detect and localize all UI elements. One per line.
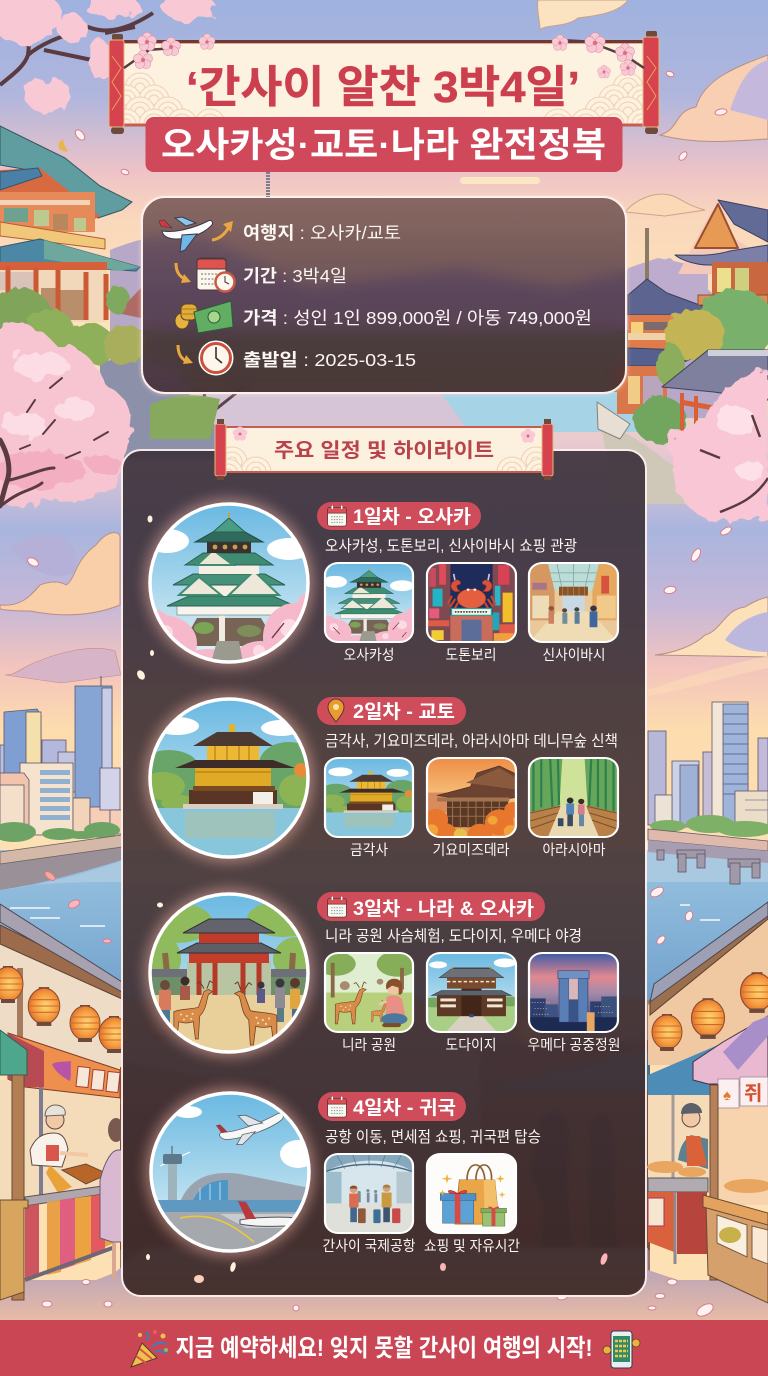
distant market street behind the panel xyxy=(120,992,650,1320)
right food stall: 쥐 xyxy=(744,1082,762,1105)
thumbnail: Kiyomizudera xyxy=(426,757,518,838)
thumbnail labels: 금각사 xyxy=(350,842,388,859)
right city skyline xyxy=(648,702,768,837)
river and bridges xyxy=(0,829,768,1020)
thumbnail: Arashiyama xyxy=(529,758,618,837)
thumbnail labels: 우메다 공중정원 xyxy=(528,1037,620,1054)
day 4 description: 공항 이동, 면세점 쇼핑, 귀국편 탑승 xyxy=(325,1128,541,1146)
thumbnail labels: 오사카성 xyxy=(344,647,394,664)
thumbnail labels xyxy=(342,1037,620,1054)
left temple xyxy=(0,126,147,367)
corner blossom sprays xyxy=(124,32,644,78)
icon: calendar with clock xyxy=(176,258,234,292)
footer text: 지금 예약하세요! 잊지 못할 간사이 여행의 시작! xyxy=(176,1335,592,1362)
left tree branches xyxy=(0,378,108,506)
thumbnail labels: 도톤보리 xyxy=(446,647,496,664)
icon: airplane and arrow xyxy=(159,217,233,252)
icon: smartphone xyxy=(603,1331,640,1368)
subtitle ribbon xyxy=(146,117,622,172)
right cherry blossom tree xyxy=(669,370,768,520)
right scroll rod xyxy=(643,31,659,134)
day 3 pill heading: 3일차 - 나라 & 오사카 xyxy=(353,898,534,920)
thumbnail: Umeda Sky xyxy=(529,953,618,1032)
day 1 circular photo: Osaka Castle xyxy=(129,499,327,673)
day 1 description: 오사카성, 도톤보리, 신사이바시 쇼핑 관광 xyxy=(325,537,577,555)
icon: coins and banknotes xyxy=(175,301,233,333)
day 2 description: 금각사, 기요미즈데라, 아라시아마 데니무숲 신책 xyxy=(325,732,618,750)
thumbnail labels xyxy=(350,842,606,859)
day 3 description: 니라 공원 사슴체험, 도다이지, 우메다 야경 xyxy=(325,927,582,945)
hanging rope between title and info panel xyxy=(266,172,270,197)
thumbnail labels: 쇼핑 및 자유시간 xyxy=(424,1238,520,1255)
left city skyline xyxy=(0,676,122,842)
day 2 xyxy=(139,694,618,862)
thumbnail: Todaiji xyxy=(420,953,523,1032)
day 3 xyxy=(133,889,620,1057)
thumbnail: Kansai Airport xyxy=(325,1154,413,1233)
day 4 pill heading xyxy=(318,1092,466,1121)
left cherry blossom tree xyxy=(0,324,132,509)
thumbnail labels xyxy=(344,647,606,664)
day 3 pill heading xyxy=(317,892,545,921)
day 4 circular photo: airport xyxy=(146,1088,316,1256)
info list xyxy=(159,217,592,375)
thumbnail: Nara Park xyxy=(324,952,414,1033)
top left blossom branches xyxy=(0,0,214,112)
thumbnail labels: 신사이바시 xyxy=(542,647,606,664)
thumbnail: Osaka Castle xyxy=(324,562,414,643)
thumbnail labels: 도다이지 xyxy=(446,1037,496,1054)
day 2 pill heading xyxy=(317,697,466,725)
title scroll banner xyxy=(109,31,659,139)
thumbnail labels xyxy=(322,1238,520,1255)
clouds xyxy=(0,0,768,696)
day 1 xyxy=(129,499,618,673)
info: departure date: 출발일 : 2025-03-15 xyxy=(243,350,416,370)
info: destination: 여행지 : 오사카/교토 xyxy=(243,223,401,243)
right temple and pagoda xyxy=(597,200,768,504)
day 1 pill heading: 1일차 - 오사카 xyxy=(353,506,471,528)
thumbnail labels: 아라시아마 xyxy=(542,842,606,859)
road xyxy=(0,1280,768,1320)
thumbnail: shopping xyxy=(427,1154,516,1233)
glowing petals inside panel xyxy=(135,516,609,1283)
thumbnail labels: 간사이 국제공항 xyxy=(322,1238,416,1255)
info: duration: 기간 : 3박4일 xyxy=(243,266,347,286)
section heading scroll: 주요 일정 및 하이라이트 xyxy=(274,439,494,462)
thumbnail: Shinsaibashi xyxy=(529,563,618,642)
icon: clock xyxy=(178,341,233,375)
left scroll rod xyxy=(109,34,124,134)
panel: trip info backdrop xyxy=(141,196,627,394)
panel: itinerary backdrop xyxy=(121,449,647,1297)
distant hills and water xyxy=(100,234,730,460)
right tree branches xyxy=(700,415,768,512)
thumbnail: Kinkakuji xyxy=(320,758,418,837)
section heading scroll xyxy=(214,419,554,480)
day 4 pill heading: 4일차 - 귀국 xyxy=(353,1097,456,1119)
thumbnail: Dotonbori xyxy=(427,563,516,642)
seigaiha corner pattern xyxy=(124,72,642,123)
day 3 circular photo: Nara deer and gate xyxy=(133,889,321,1057)
subtitle ribbon: 오사카성·교토·나라 완전정복 xyxy=(161,126,606,165)
right food stall xyxy=(647,902,768,1303)
icon: party popper xyxy=(131,1330,168,1367)
info: price: 가격 : 성인 1인 899,000원 / 아동 749,000원 xyxy=(243,308,592,328)
day 1 pill heading xyxy=(317,502,481,530)
day 2 circular photo: Kinkakuji xyxy=(139,694,319,862)
day 2 pill heading: 2일차 - 교토 xyxy=(353,701,455,723)
left food stall xyxy=(0,904,129,1300)
thumbnail labels: 니라 공원 xyxy=(342,1037,396,1054)
right food stall: ♠ xyxy=(723,1087,731,1104)
title text: ‘간사이 알찬 3박4일’ xyxy=(186,63,580,112)
thumbnail labels: 기요미즈데라 xyxy=(432,842,510,859)
day 4 xyxy=(146,1088,541,1256)
footer call to action xyxy=(0,1320,768,1376)
